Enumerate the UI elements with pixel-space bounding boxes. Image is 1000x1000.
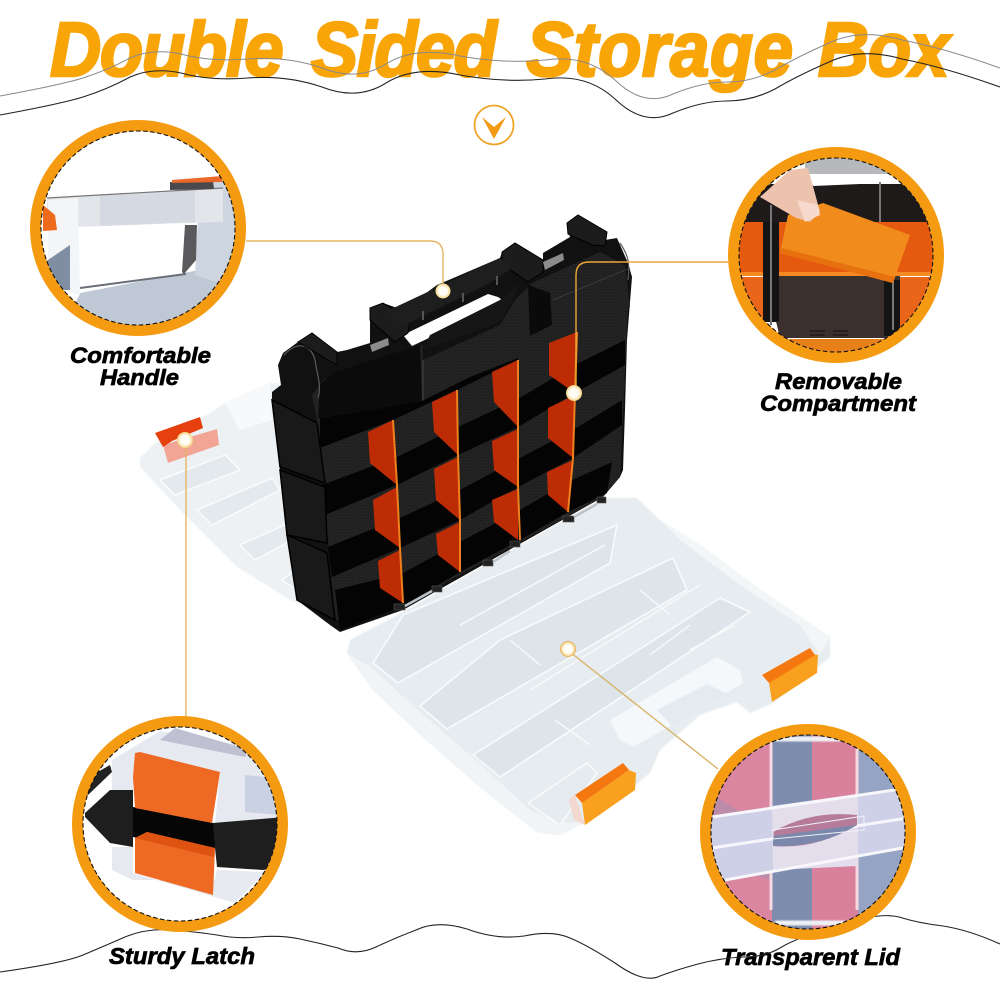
finger bbox=[760, 168, 820, 222]
label: Comfortable Handle: Comfortable bbox=[70, 343, 211, 368]
top clips bbox=[298, 215, 607, 365]
side bumpers bbox=[272, 400, 335, 620]
latch photo: lower orange tab bbox=[135, 832, 215, 895]
label: Transparent Lid: Transparent Lid bbox=[721, 944, 901, 970]
panel: transparent lid detail bbox=[700, 724, 916, 940]
compartment photo: dark mesh bbox=[765, 276, 900, 338]
lid photo: handle slot bbox=[773, 814, 857, 847]
latch photo: clear plastic top bbox=[112, 731, 280, 825]
panel: removable compartment detail bbox=[728, 147, 944, 363]
lid outer rim bbox=[347, 653, 583, 835]
interior walls bbox=[320, 307, 628, 620]
orange dividers bbox=[368, 332, 577, 603]
handle photo: bar bbox=[47, 188, 223, 228]
latch photo: clear plastic bottom bbox=[112, 847, 265, 903]
callout: compartment line bbox=[566, 262, 728, 401]
hinges bbox=[394, 497, 606, 610]
top wave line, gray bbox=[0, 35, 1000, 99]
callout: latch line bbox=[177, 432, 193, 718]
latch photo: black band bbox=[85, 790, 285, 870]
black shelf bands bbox=[320, 340, 625, 630]
top wave line, black bbox=[0, 54, 1000, 118]
lid photo: translucent band bbox=[705, 788, 908, 884]
front lid, transparent bbox=[347, 498, 830, 835]
label: Removable Compartment: Removable bbox=[775, 369, 902, 394]
box silhouette bbox=[272, 215, 632, 632]
compartment photo: vertical rails bbox=[763, 222, 779, 322]
corner rim highlights bbox=[284, 243, 629, 398]
label: Removable Compartment: Compartment bbox=[760, 391, 918, 416]
back lid latch bbox=[155, 417, 219, 463]
label: Comfortable Handle: Handle bbox=[100, 365, 179, 390]
compartment photo: grey wall bbox=[805, 158, 895, 174]
compartment photo: orange rows bbox=[735, 222, 940, 274]
panel: comfortable handle detail bbox=[30, 120, 250, 340]
title: Storage bbox=[526, 6, 793, 93]
panel: sturdy latch detail bbox=[72, 716, 288, 932]
handle photo: left post bbox=[48, 198, 80, 295]
handle photo: window bbox=[87, 223, 185, 227]
lid handle bbox=[610, 657, 743, 747]
title bbox=[50, 6, 952, 93]
lid inner trays bbox=[373, 525, 750, 825]
lid latch, right bbox=[762, 648, 818, 702]
bottom wave line bbox=[0, 916, 1000, 978]
label: Comfortable Handle bbox=[70, 343, 211, 390]
icon: chevron down badge bbox=[474, 106, 514, 144]
label: Sturdy Latch: Sturdy Latch bbox=[109, 943, 255, 969]
storage box body bbox=[272, 215, 632, 632]
callout: handle line bbox=[246, 241, 450, 298]
orange divider edges bbox=[393, 332, 577, 603]
lid photo: colored stripes bbox=[711, 742, 772, 922]
back lid, transparent bbox=[140, 383, 320, 608]
title: Double bbox=[50, 6, 284, 93]
handle bar bbox=[385, 258, 512, 326]
compartment photo: black back bbox=[735, 183, 935, 225]
top face bbox=[312, 252, 630, 448]
latch photo: upper orange tab bbox=[133, 752, 220, 823]
title: Sided bbox=[311, 6, 499, 93]
handle photo: lower body bbox=[76, 270, 224, 325]
handle opening bbox=[403, 294, 505, 346]
lid latch, lower bbox=[569, 763, 636, 825]
callout: lid line bbox=[560, 642, 718, 769]
title: Box bbox=[818, 6, 952, 93]
label: Removable Compartment bbox=[760, 369, 918, 416]
lifted orange piece bbox=[780, 203, 910, 283]
